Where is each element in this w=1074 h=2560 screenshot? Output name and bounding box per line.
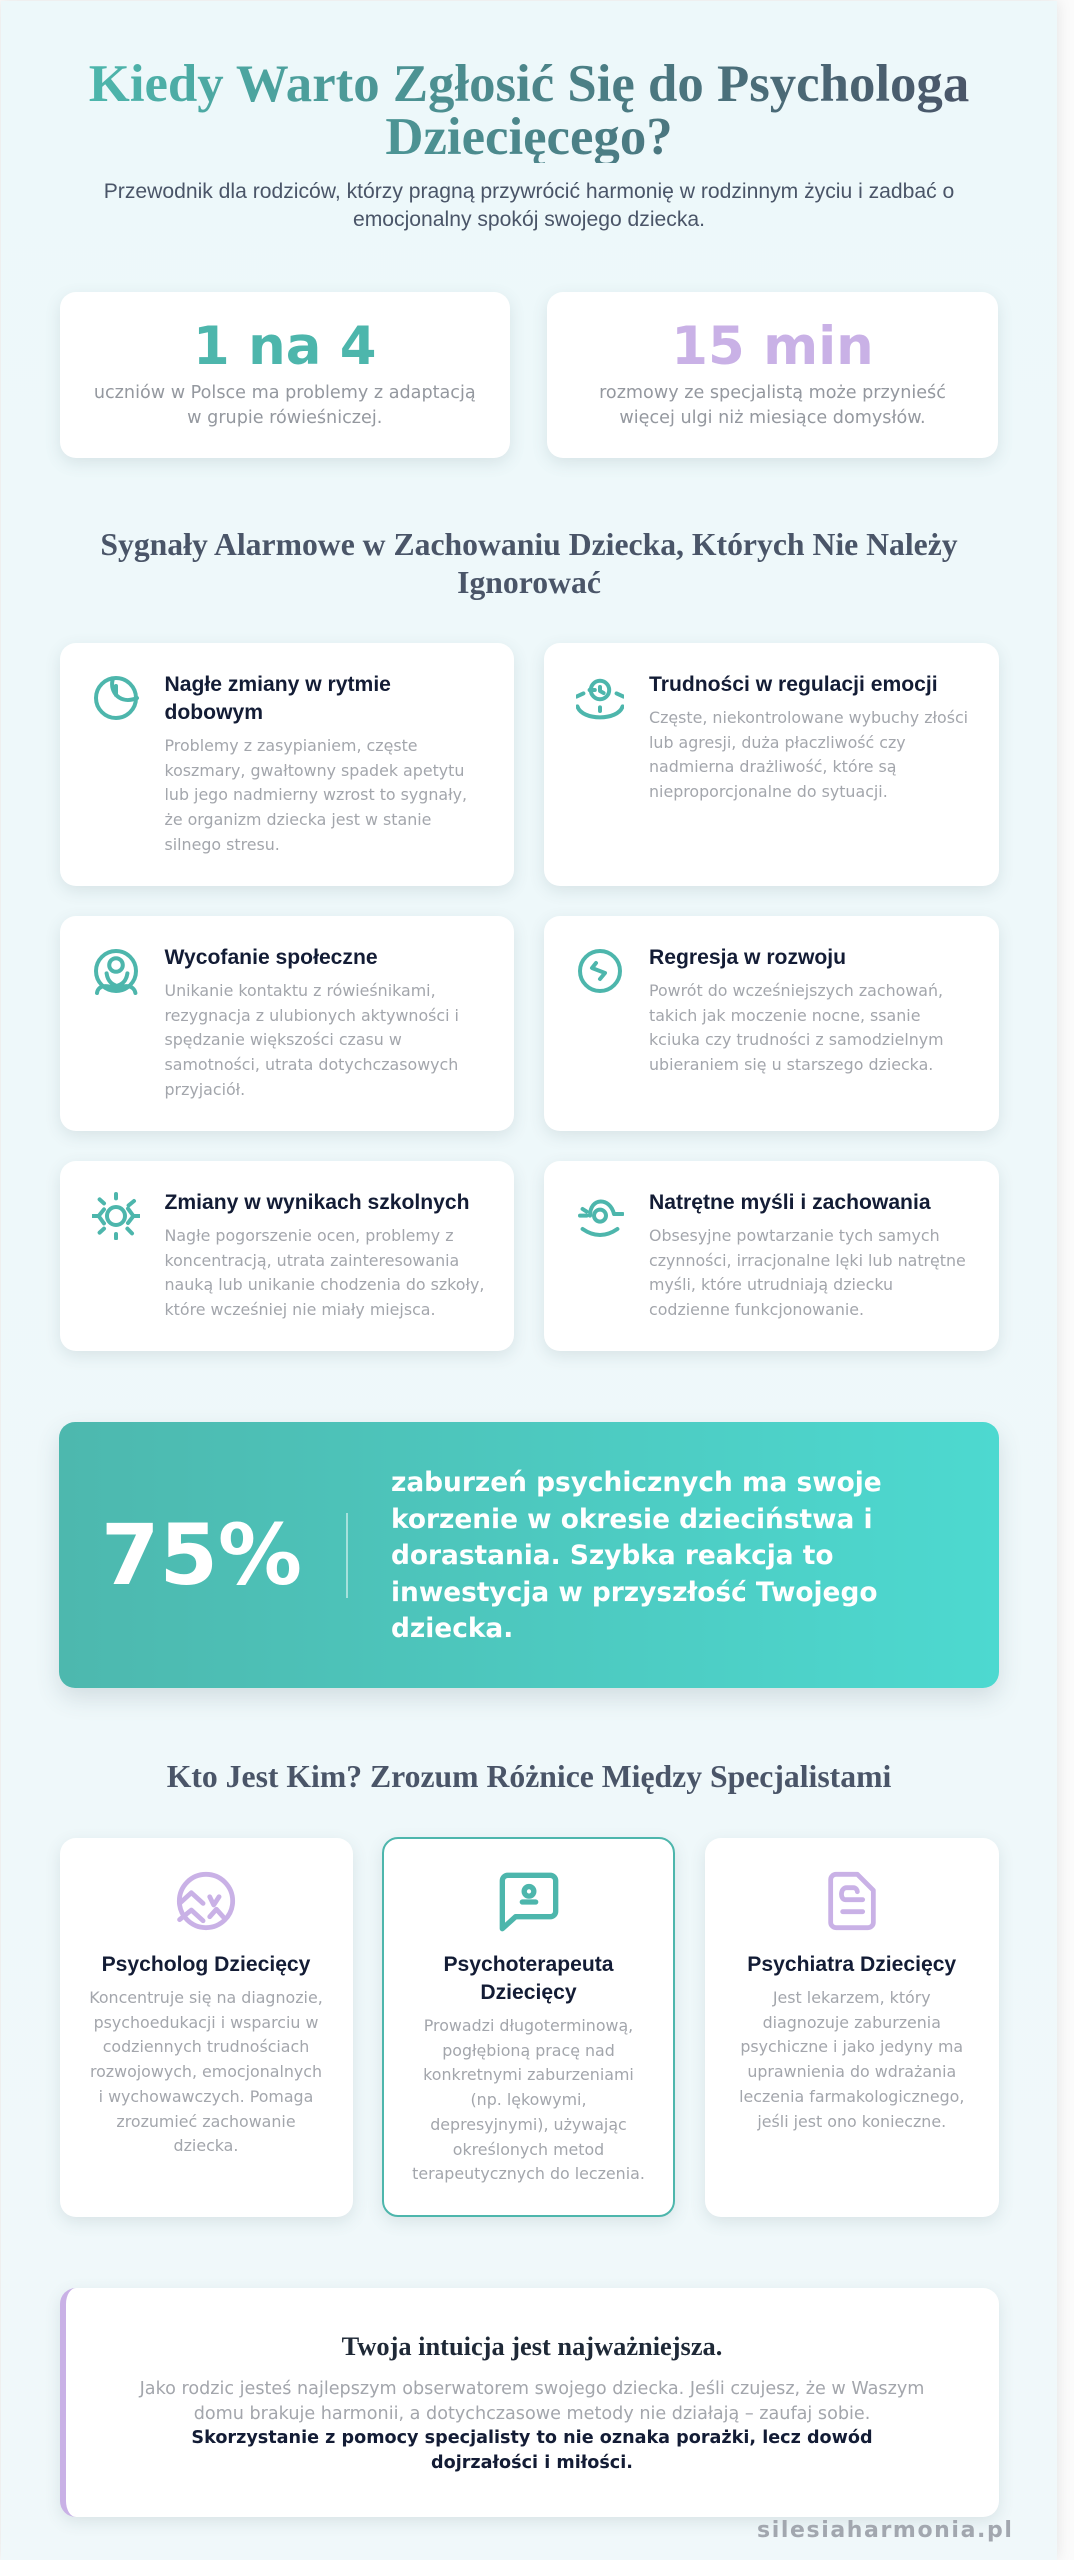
- signal description: [164, 736, 467, 854]
- signal description: Nagłe pogorszenie ocen, problemy z: [164, 1226, 454, 1245]
- heading: warning signs: [100, 527, 958, 600]
- divider: [346, 1513, 348, 1598]
- specialist description: określonych metod: [453, 2140, 604, 2159]
- specialist title: Psychiatra Dziecięcy: [747, 1953, 956, 1976]
- specialist description: uprawnienia do wdrażania: [747, 2062, 956, 2081]
- heading: warning signs: Ignorować: [457, 564, 601, 600]
- closing text: Skorzystanie z pomocy specjalisty to nie oznaka porażki, lecz dowód: [191, 2428, 873, 2448]
- signal description: nieproporcjonalne do sytuacji.: [649, 782, 888, 801]
- signal title: Nagłe zmiany w rytmie: [164, 673, 391, 696]
- specialist description: (np. lękowymi,: [470, 2090, 586, 2109]
- signal description: lub jego nadmierny wzrost to sygnały,: [164, 785, 467, 804]
- specialist card: psychologist: [60, 1838, 352, 2217]
- icon: sun: [92, 1192, 140, 1240]
- signal card: social withdrawal: [60, 916, 514, 1131]
- stat card: 15 min: więcej ulgi niż miesiące domysłów.: [619, 408, 926, 428]
- heading: warning signs: Sygnały Alarmowe w Zachowaniu Dziecka, Których Nie Należy: [100, 527, 958, 562]
- subtitle: Przewodnik dla rodziców, którzy pragną przywrócić harmonię w rodzinnym życiu i zadbać o: [104, 180, 954, 203]
- icon: intrusive thought cycle: [578, 1200, 624, 1237]
- icon: document: [828, 1872, 876, 1930]
- specialist description: [739, 1988, 964, 2131]
- closing title: Twoja intuicja jest najważniejsza.: [342, 2331, 722, 2361]
- stat card: 1 na 4: w grupie rówieśniczej.: [187, 408, 382, 428]
- signal description: kciuka czy trudności z samodzielnym: [649, 1030, 944, 1049]
- stat card: 15 min: [547, 292, 998, 458]
- signal description: [649, 1226, 966, 1319]
- signal description: koncentracją, utrata zainteresowania: [164, 1251, 459, 1270]
- signal title: Natrętne myśli i zachowania: [649, 1191, 931, 1214]
- signal card: developmental regression: [544, 916, 998, 1131]
- signal description: myśli, które utrudniają dziecku: [649, 1275, 893, 1294]
- specialist description: leczenia farmakologicznego,: [739, 2087, 964, 2106]
- specialist description: [412, 2016, 645, 2183]
- signal description: nadmierna drażliwość, które są: [649, 757, 896, 776]
- stat card: 1 na 4: [60, 292, 510, 458]
- signal card: sleep rhythm: [60, 643, 514, 886]
- specialist description: jeśli jest ono konieczne.: [757, 2112, 946, 2131]
- specialist card: psychiatrist: [705, 1838, 998, 2217]
- signal description: przyjaciół.: [164, 1080, 245, 1099]
- signal description: Powrót do wcześniejszych zachowań,: [649, 981, 943, 1000]
- closing text: Jako rodzic jesteś najlepszym obserwatorem swojego dziecka. Jeśli czujesz, że w Waszym: [140, 2379, 924, 2399]
- signal description: koszmary, gwałtowny spadek apetytu: [164, 761, 464, 780]
- stat card: 1 na 4: uczniów w Polsce ma problemy z adaptacją: [94, 383, 476, 403]
- subtitle: emocjonalny spokój swojego dziecka.: [353, 208, 705, 231]
- banner text: inwestycja w przyszłość Twojego: [391, 1577, 877, 1608]
- signal description: codzienne funkcjonowanie.: [649, 1300, 864, 1319]
- banner text: dziecka.: [391, 1613, 513, 1644]
- icon: face with chevrons: [176, 1872, 235, 1930]
- signal description: czynności, irracjonalne lęki lub natrętne: [649, 1251, 966, 1270]
- signal card: emotion regulation: [544, 643, 998, 886]
- signal description: [164, 981, 459, 1099]
- title: [60, 58, 998, 163]
- signal title: [164, 673, 391, 724]
- specialist title: Psycholog Dziecięcy: [102, 1953, 310, 1976]
- specialist description: psychiczne i jako jedyny ma: [740, 2037, 963, 2056]
- specialist description: Prowadzi długoterminową,: [424, 2016, 633, 2035]
- signal description: samotności, utrata dotychczasowych: [164, 1055, 458, 1074]
- specialist card: psychotherapist (highlighted): [382, 1837, 675, 2217]
- signal description: Unikanie kontaktu z rówieśnikami,: [164, 981, 436, 1000]
- banner: 75 percent: [59, 1422, 999, 1688]
- signal description: ubieraniem się u starszego dziecka.: [649, 1055, 933, 1074]
- icon: person in circle: [94, 949, 138, 995]
- specialist description: [89, 1988, 323, 2155]
- signal description: lub agresji, duża płaczliwość czy: [649, 733, 906, 752]
- signal description: Częste, niekontrolowane wybuchy złości: [649, 708, 968, 727]
- subtitle: [104, 180, 954, 231]
- stat card: 15 min: 15 min: [671, 316, 874, 377]
- specialist description: zrozumieć zachowanie: [116, 2112, 296, 2131]
- banner text: [391, 1467, 882, 1644]
- signal title: Zmiany w wynikach szkolnych: [164, 1191, 470, 1214]
- signal description: Obsesyjne powtarzanie tych samych: [649, 1226, 940, 1245]
- signal description: [164, 1226, 484, 1319]
- signal description: rezygnacja z ulubionych aktywności i: [164, 1006, 459, 1025]
- signal description: [649, 708, 968, 801]
- closing text: dojrzałości i miłości.: [431, 2453, 633, 2473]
- specialist description: psychoedukacji i wsparciu w: [94, 2013, 318, 2032]
- closing text: [138, 2379, 924, 2473]
- icon: regression arrow: [578, 949, 622, 993]
- specialist title: [443, 1953, 614, 2004]
- specialist description: i wychowawczych. Pomaga: [99, 2087, 313, 2106]
- signal title: Wycofanie społeczne: [164, 946, 378, 969]
- specialist title: Dziecięcy: [480, 1981, 577, 2004]
- specialist description: Jest lekarzem, który: [773, 1988, 931, 2007]
- signal description: silnego stresu.: [164, 835, 280, 854]
- specialist description: pogłębioną pracę nad: [442, 2041, 615, 2060]
- signal description: że organizm dziecka jest w stanie: [164, 810, 431, 829]
- signal title: dobowym: [164, 701, 263, 724]
- closing text: domu brakuje harmonii, a dotychczasowe metody nie działają – zaufaj sobie.: [194, 2404, 870, 2424]
- icon: clock moon: [94, 676, 140, 720]
- stat card: 1 na 4: 1 na 4: [193, 316, 376, 377]
- banner text: korzenie w okresie dzieciństwa i: [391, 1504, 873, 1535]
- specialist title: Psychoterapeuta: [443, 1953, 614, 1976]
- watermark: silesiaharmonia.pl: [757, 2518, 1013, 2543]
- signal description: [649, 981, 944, 1074]
- signal title: Regresja w rozwoju: [649, 946, 846, 969]
- specialist description: diagnozuje zaburzenia: [763, 2013, 941, 2032]
- specialist description: codziennych trudnościach: [103, 2037, 309, 2056]
- banner text: dorastania. Szybka reakcja to: [391, 1540, 834, 1571]
- signal description: Problemy z zasypianiem, częste: [164, 736, 418, 755]
- closing panel: intuition: [60, 2288, 998, 2517]
- heading: specialists: Kto Jest Kim? Zrozum Różnice Między Specjalistami: [167, 1759, 891, 1794]
- signal card: school results: [60, 1161, 514, 1351]
- specialist description: rozwojowych, emocjonalnych: [90, 2062, 322, 2081]
- icon: emotion face: [576, 678, 624, 720]
- specialist description: dziecka.: [174, 2136, 238, 2155]
- signal card: intrusive thoughts: [544, 1161, 998, 1351]
- stat card: 15 min: rozmowy ze specjalistą może przynieść: [599, 383, 946, 403]
- icon: speech bubble with person: [500, 1872, 558, 1932]
- banner text: zaburzeń psychicznych ma swoje: [391, 1467, 882, 1498]
- signal title: Trudności w regulacji emocji: [649, 673, 938, 696]
- signal description: nauką lub unikanie chodzenia do szkoły,: [164, 1275, 484, 1294]
- big number: 75%: [101, 1506, 302, 1604]
- specialist description: Koncentruje się na diagnozie,: [89, 1988, 323, 2007]
- signal description: które wcześniej nie miały miejsca.: [164, 1300, 436, 1319]
- signal description: takich jak moczenie nocne, ssanie: [649, 1006, 920, 1025]
- signal description: spędzanie większości czasu w: [164, 1030, 402, 1049]
- specialist description: depresyjnymi), używając: [430, 2115, 627, 2134]
- specialist description: konkretnymi zaburzeniami: [423, 2065, 634, 2084]
- specialist description: terapeutycznych do leczenia.: [412, 2164, 645, 2183]
